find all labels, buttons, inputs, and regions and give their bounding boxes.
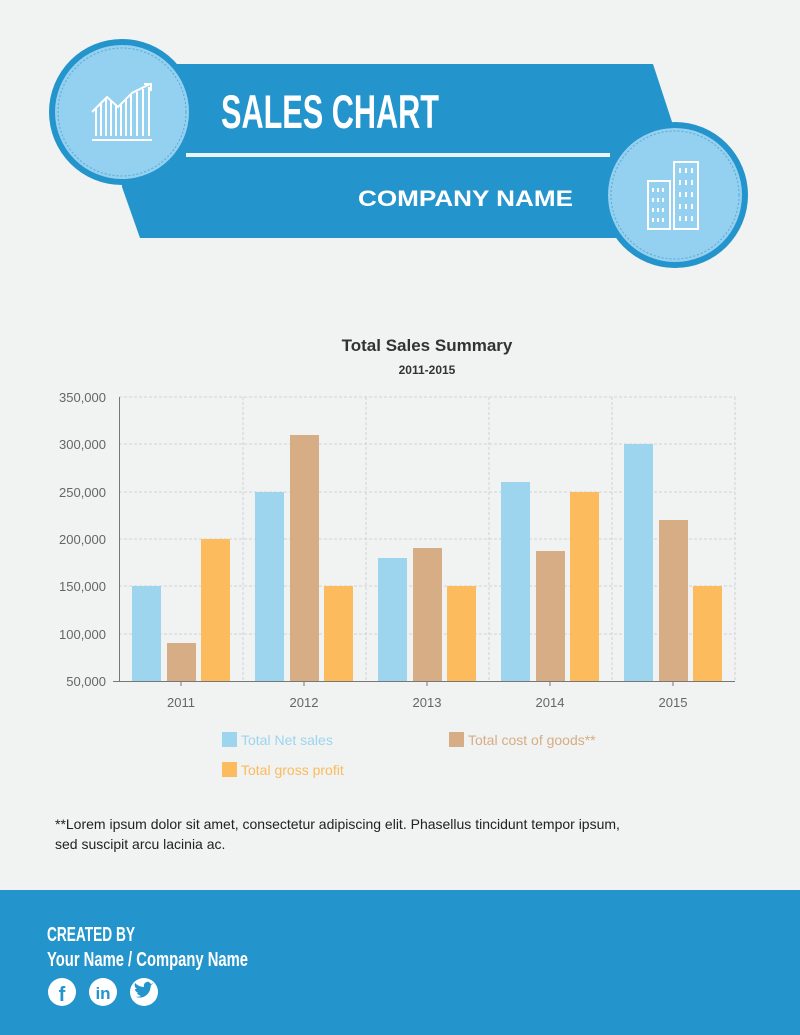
bar chart: 250,000 xyxy=(59,485,106,500)
chart subtitle: 2011-2015 xyxy=(399,363,456,377)
legend: Total gross profit xyxy=(241,762,344,778)
icon: chart circle xyxy=(49,39,195,185)
bar chart: 2013 xyxy=(413,695,441,710)
header banner xyxy=(122,64,672,238)
footnote: **Lorem ipsum dolor sit amet, consectetur adipiscing elit. Phasellus tincidunt tempor ipsum, xyxy=(55,816,620,832)
icons: social: in xyxy=(95,984,111,1003)
bar chart: 350,000 xyxy=(59,390,106,405)
bar chart: 300,000 xyxy=(59,437,106,452)
footnote: sed suscipit arcu lacinia ac. xyxy=(55,836,225,852)
bar chart: 2012 xyxy=(290,695,318,710)
icons: social xyxy=(48,978,158,1006)
chart title: Total Sales Summary xyxy=(342,336,513,355)
subtitle: company name: COMPANY NAME xyxy=(358,186,573,211)
footer: created by: CREATED BY xyxy=(47,924,135,946)
bar chart xyxy=(59,390,735,710)
bar chart: 2015 xyxy=(659,695,687,710)
bar chart: 150,000 xyxy=(59,579,106,594)
bar chart: 50,000 xyxy=(66,674,106,689)
legend: Total cost of goods** xyxy=(468,732,596,748)
bar chart: 2011 xyxy=(167,695,195,710)
footer: name: Your Name / Company Name xyxy=(47,949,248,971)
bar chart: 2014 xyxy=(536,695,564,710)
legend: Total Net sales xyxy=(241,732,333,748)
icons: social: f xyxy=(59,984,66,1006)
icon: buildings circle xyxy=(602,122,748,268)
footer xyxy=(0,890,800,1035)
title: SALES CHART xyxy=(221,85,439,138)
footnote xyxy=(55,816,620,852)
legend xyxy=(222,732,596,778)
bar chart: 200,000 xyxy=(59,532,106,547)
bar chart: 100,000 xyxy=(59,627,106,642)
